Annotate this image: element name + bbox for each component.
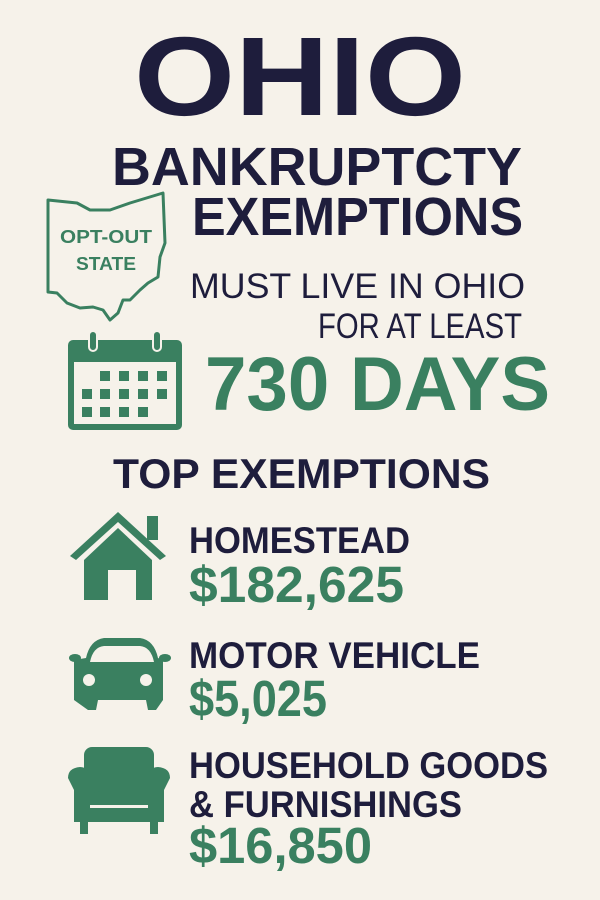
- icon: house: [70, 512, 166, 600]
- icon: Ohio state outline with opt-out label: STATE: [76, 254, 136, 274]
- residency requirement text: 730 DAYS: [205, 342, 550, 427]
- title: OHIO: OHIO: [134, 14, 466, 139]
- motor vehicle exemption: MOTOR VEHICLE: [189, 635, 480, 676]
- homestead exemption: $182,625: [189, 556, 404, 613]
- heading: top exemptions: TOP EXEMPTIONS: [113, 450, 490, 497]
- icon: calendar: [68, 331, 182, 430]
- subtitle: bankruptcy exemptions: EXEMPTIONS: [192, 187, 523, 247]
- icon: armchair: [68, 747, 170, 834]
- household goods exemption: [189, 745, 548, 874]
- household goods exemption: $16,850: [189, 817, 372, 874]
- motor vehicle exemption: $5,025: [189, 670, 327, 727]
- icon: Ohio state outline with opt-out label: [48, 193, 165, 320]
- subtitle: bankruptcy exemptions: [112, 137, 523, 247]
- icon: Ohio state outline with opt-out label: OPT-OUT: [60, 227, 152, 247]
- residency requirement text: [190, 267, 550, 427]
- homestead exemption: HOMESTEAD: [189, 520, 410, 561]
- residency requirement text: FOR AT LEAST: [318, 307, 522, 346]
- subtitle: bankruptcy exemptions: BANKRUPTCTY: [112, 137, 522, 197]
- motor vehicle exemption: [189, 635, 480, 727]
- icon: car: [69, 638, 171, 710]
- household goods exemption: HOUSEHOLD GOODS: [189, 745, 548, 786]
- household goods exemption: & FURNISHINGS: [189, 784, 462, 825]
- homestead exemption: [189, 520, 410, 613]
- residency requirement text: MUST LIVE IN OHIO: [190, 267, 525, 306]
